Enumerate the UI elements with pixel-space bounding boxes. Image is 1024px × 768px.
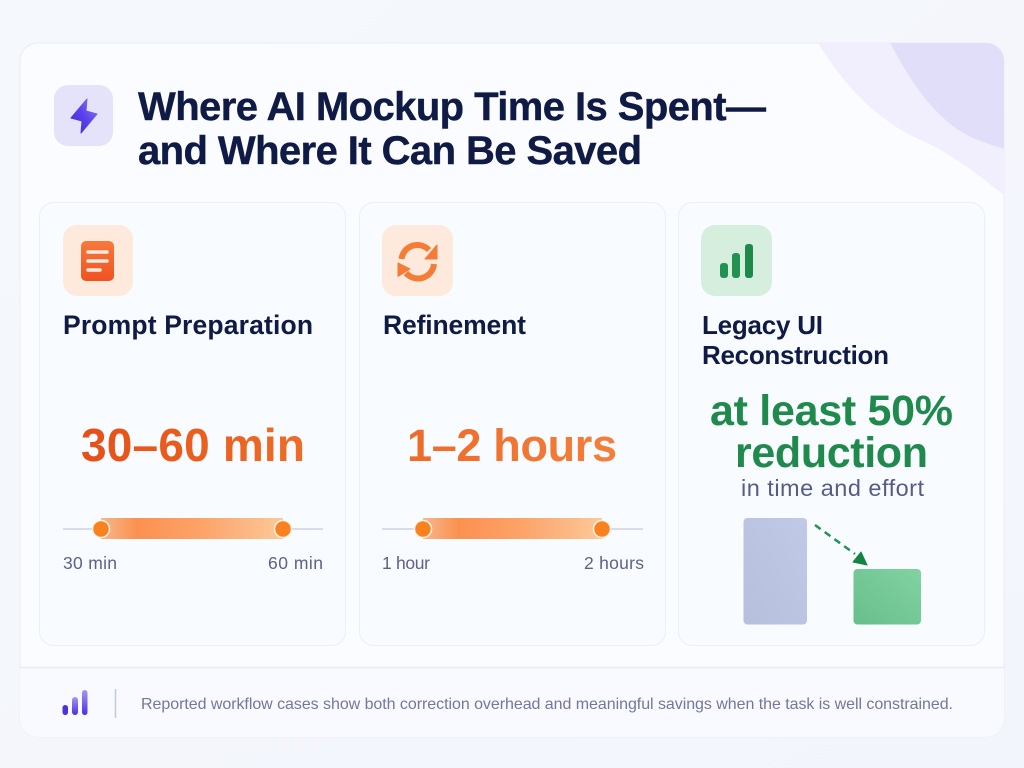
title: and Where It Can Be Saved bbox=[138, 129, 642, 173]
heading: legacy UI reconstruction: Reconstruction bbox=[702, 340, 889, 370]
heading: legacy UI reconstruction: Legacy UI bbox=[702, 310, 823, 340]
subtext: in time and effort bbox=[741, 475, 924, 501]
icon: document bbox=[63, 225, 133, 296]
arrow: reduction bbox=[815, 525, 867, 565]
footer note: Reported workflow cases show both correction overhead and meaningful savings when the task is well constrained. bbox=[141, 696, 953, 713]
range labels: 60 min bbox=[268, 553, 323, 573]
value: at least 50% reduction: reduction bbox=[735, 429, 928, 477]
range bar: 1 to 2 hours bbox=[382, 518, 643, 539]
bar: after bbox=[854, 569, 921, 624]
icon: footer bars bbox=[62, 690, 88, 715]
footer divider bbox=[20, 666, 1004, 668]
value: 1–2 hours: 1–2 hours bbox=[407, 420, 617, 471]
range labels: 2 hours bbox=[584, 553, 644, 573]
icon: green bars bbox=[701, 225, 772, 296]
range labels bbox=[63, 553, 323, 573]
range labels bbox=[382, 553, 644, 573]
heading: legacy UI reconstruction bbox=[702, 310, 889, 370]
value: at least 50% reduction: at least 50% bbox=[710, 387, 953, 435]
value: at least 50% reduction bbox=[710, 387, 953, 477]
icon: lightning bolt bbox=[54, 85, 113, 146]
range labels: 1 hour bbox=[382, 553, 430, 573]
range bar: 30 to 60 min bbox=[63, 518, 323, 539]
bar: before bbox=[744, 518, 807, 624]
panel: prompt preparation bbox=[40, 202, 346, 646]
title: Where AI Mockup Time Is Spent— bbox=[138, 85, 766, 129]
icon: refresh arrows bbox=[382, 225, 453, 296]
value: 30–60 min: 30–60 min bbox=[81, 419, 305, 471]
panel: refinement bbox=[360, 202, 666, 646]
heading: refinement: Refinement bbox=[383, 310, 526, 340]
range labels: 30 min bbox=[63, 553, 117, 573]
title bbox=[138, 85, 766, 173]
panel: legacy UI reconstruction bbox=[678, 202, 984, 646]
heading: prompt preparation: Prompt Preparation bbox=[63, 310, 313, 340]
footer separator bbox=[114, 689, 116, 718]
